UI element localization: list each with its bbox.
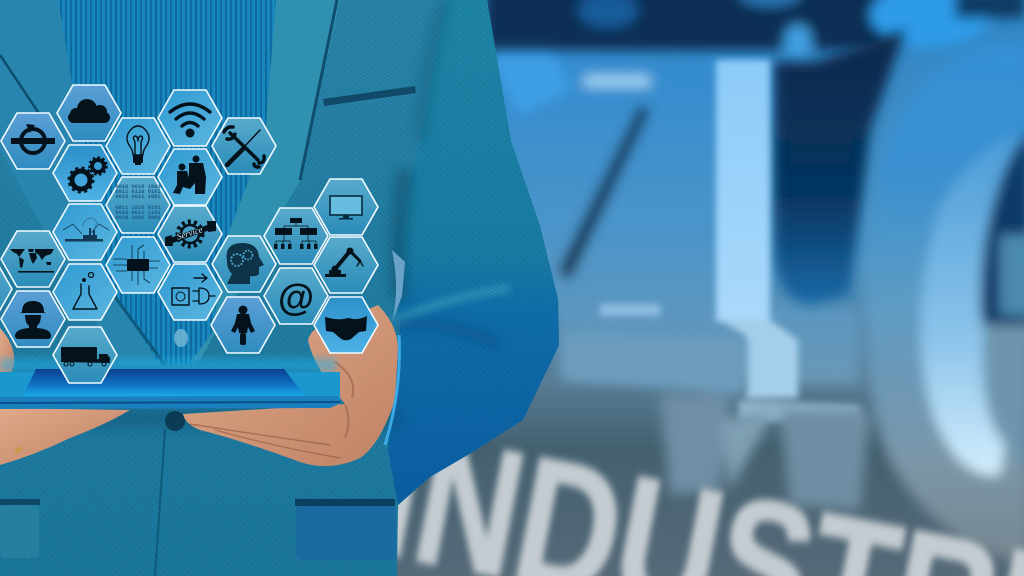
hexagon: at sign (264, 268, 328, 324)
hexagon: factory landscape (53, 204, 117, 260)
hexagon icon grid (0, 85, 378, 383)
background: figure 4 lower block (565, 335, 870, 510)
background: figure 4 body (490, 18, 860, 385)
lower jacket pockets (0, 411, 396, 576)
jacket pocket slit (323, 86, 416, 106)
hexagon: partial left edge (0, 261, 12, 317)
hexagon: gears (53, 145, 117, 201)
background: top dark band (485, 0, 1024, 60)
hexagon: truck (53, 327, 117, 383)
hexagon: wifi (158, 90, 222, 146)
hexagon: construction worker (1, 291, 65, 347)
tablet (0, 358, 341, 409)
hexagon: robot arm (314, 237, 378, 293)
hexagon: rider on vehicle (211, 297, 275, 353)
hexagon: rotation loop (1, 113, 65, 169)
lapels (0, 0, 340, 365)
shirt cuff (385, 335, 399, 445)
hexagon: at sign: @ (278, 277, 314, 318)
hexagon: binary code: 0010 0011 1001 (115, 194, 161, 200)
hexagon: binary code: 0010 0011 1101 (115, 210, 161, 216)
hexagon: world map (1, 231, 65, 287)
hexagon: socket and plug (158, 264, 222, 320)
hexagon: handshake (314, 297, 378, 353)
background: dark column behind the 4 (774, 30, 905, 305)
hexagon: binary code: 0010 0010 1001 (115, 184, 161, 190)
hexagon: chemistry flask (53, 264, 117, 320)
jacket: torso and sleeve (0, 0, 560, 576)
hexagon: cloud (57, 85, 121, 141)
left hand (0, 328, 130, 465)
photo foreground: businessman holding tablet with hexagon icons (0, 0, 559, 576)
background: figure 0 (866, 40, 1024, 565)
right hand (183, 305, 398, 466)
hexagon: light bulb (106, 118, 170, 174)
background: light stripe of the 4 (600, 60, 860, 425)
hexagon: microchip (106, 237, 170, 293)
shirt button (174, 329, 188, 347)
hexagon: binary code (106, 177, 170, 233)
hexagon: service gear and wrench: Service (176, 224, 204, 242)
hexagon: head with gears (212, 236, 276, 292)
hexagon: binary code: 0011 1010 0101 (115, 205, 161, 211)
hexagon: monitor (314, 179, 378, 235)
hexagon: organization chart (264, 208, 328, 264)
hexagon: wrench and screwdriver (212, 118, 276, 174)
hexagon: binary code: 0011 0110 0101 (115, 189, 161, 195)
shirt with blue stripes (58, 0, 276, 365)
hexagon: service gear and wrench (158, 206, 222, 262)
hexagon: people (158, 149, 222, 205)
hexagon: binary code: 0010 1001 0001 (115, 215, 161, 221)
